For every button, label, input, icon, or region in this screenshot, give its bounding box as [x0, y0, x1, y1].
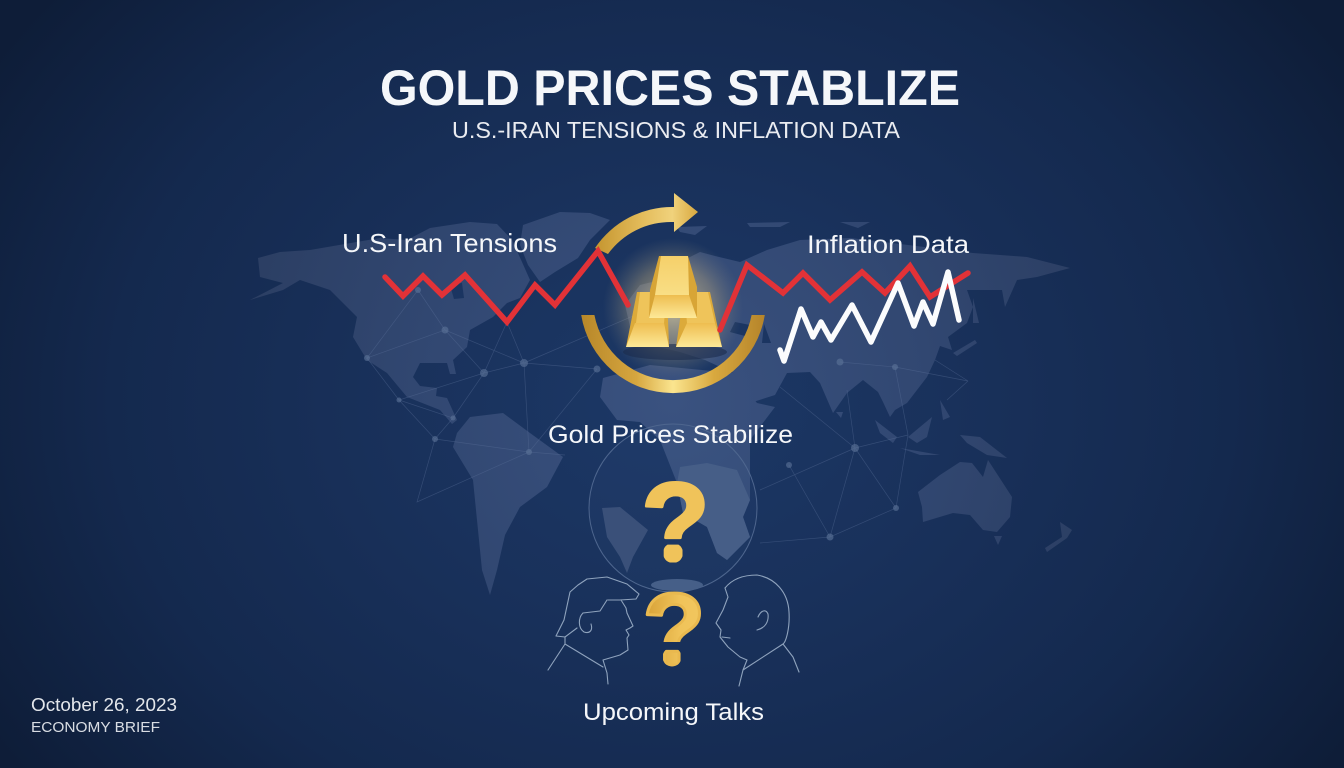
- world map: [250, 212, 1072, 595]
- label: Inflation Data: Inflation Data: [807, 231, 969, 259]
- glow behind gold bars: [603, 238, 743, 378]
- question mark: upper: ?: [641, 460, 710, 585]
- red trend line: inflation: [720, 265, 968, 330]
- globe: Africa: [677, 463, 750, 560]
- map: South America: [453, 413, 563, 595]
- map: islands: [677, 222, 1072, 552]
- date: October 26, 2023: [31, 695, 177, 715]
- upper gold arrow: [595, 193, 698, 254]
- subtitle: U.S.-IRAN TENSIONS & INFLATION DATA: [452, 117, 901, 143]
- globe: [589, 424, 757, 592]
- map: Africa: [600, 365, 775, 560]
- label: Gold Prices Stabilize: Gold Prices Stabilize: [548, 421, 793, 449]
- question mark: lower: ?: [643, 572, 705, 687]
- map: Eurasia: [625, 238, 1070, 417]
- source line: ECONOMY BRIEF: [31, 719, 160, 736]
- profile: left figure: [548, 577, 639, 684]
- shadow under gold bars: [623, 344, 727, 360]
- red trend line: tensions: [385, 251, 628, 322]
- map: North America: [250, 222, 530, 424]
- network nodes: [364, 287, 899, 540]
- globe: South America: [602, 507, 648, 573]
- gold bars: [626, 256, 722, 347]
- map: Australia: [918, 460, 1012, 532]
- gold stabilize emblem: [581, 193, 765, 393]
- white trend line: inflation: [780, 272, 959, 361]
- title: GOLD PRICES STABLIZE: [380, 60, 960, 116]
- label: U.S-Iran Tensions: U.S-Iran Tensions: [342, 228, 557, 258]
- lower gold arc: [581, 315, 765, 393]
- map: Greenland: [520, 212, 610, 282]
- network lines: [367, 290, 968, 543]
- globe: pedestal ellipse: [651, 579, 703, 591]
- profile: right figure: [716, 575, 799, 686]
- label: Upcoming Talks: Upcoming Talks: [583, 699, 764, 726]
- map: inland seas: [450, 283, 771, 345]
